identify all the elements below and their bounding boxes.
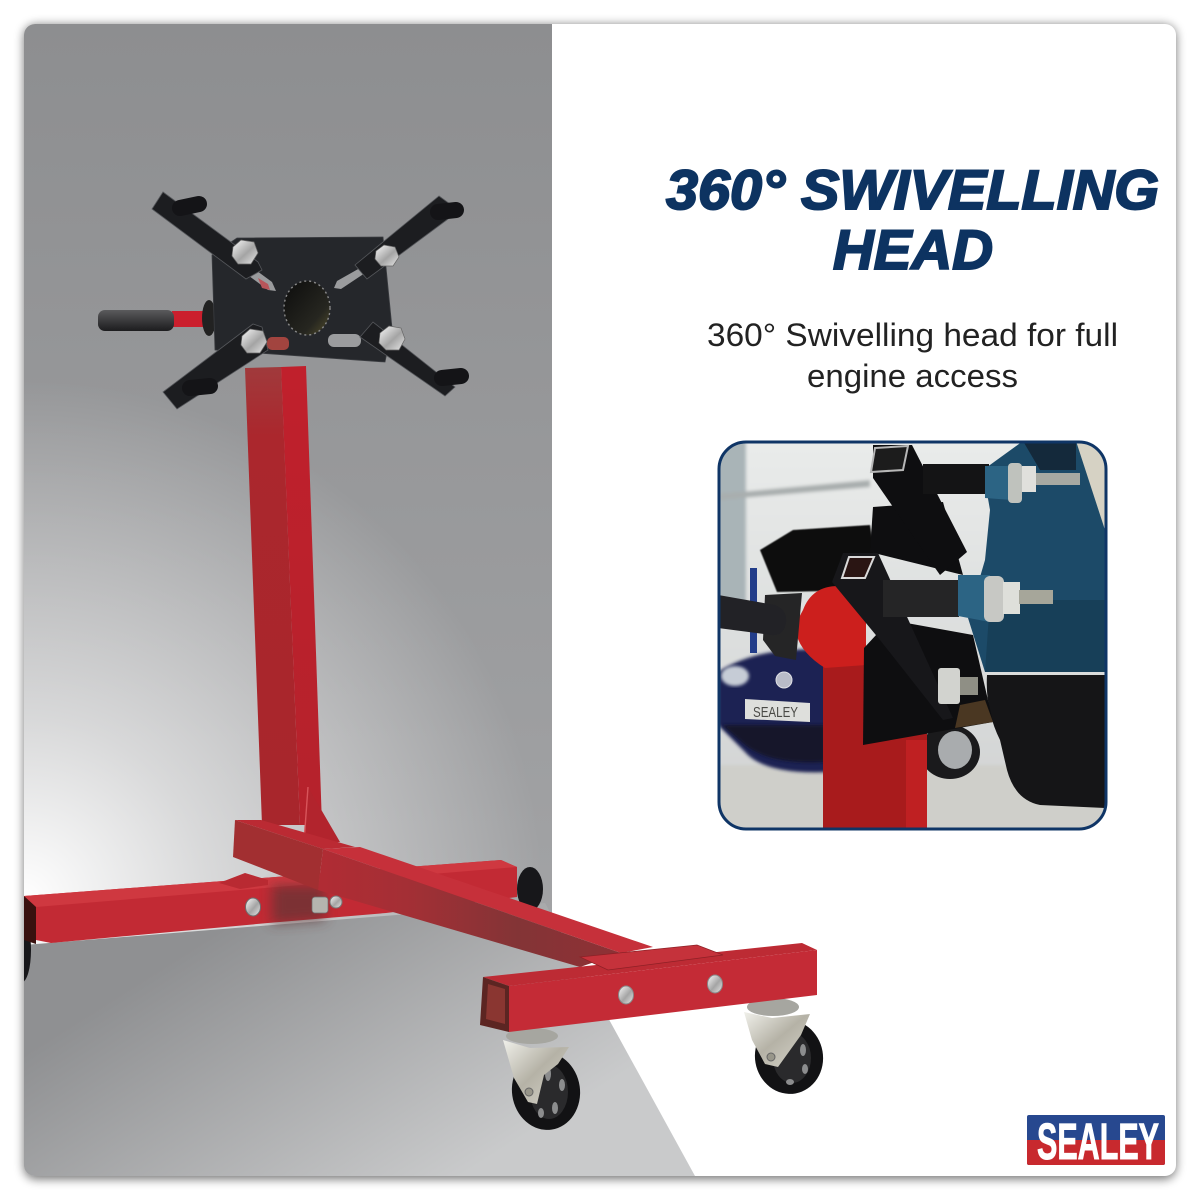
body text [707,317,1118,394]
front arm [832,446,953,720]
front cross beam [480,943,817,1032]
nuts [232,240,405,353]
vertical column [245,366,322,825]
heading: HEAD [833,218,993,281]
left edge wheel [24,940,31,982]
plate slots [245,268,365,350]
studio floor [24,903,695,1176]
black mount plates [863,445,993,745]
spine front section [318,847,653,967]
blue bosses [958,466,1012,622]
photo inset: head attached to engine [718,441,1110,832]
arms [152,192,455,409]
rear cross beam [24,860,517,944]
body text: engine access [807,358,1018,394]
gusset [304,787,340,842]
handle [98,300,216,336]
workshop background [718,441,1108,831]
sump [987,675,1105,808]
body text: 360° Swivelling head for full [707,317,1118,353]
arm tubes [180,204,461,388]
spacer tubes [883,464,989,617]
heading: 360° SWIVELLING [666,158,1159,221]
spine rear section [233,820,355,890]
heading [666,158,1159,281]
rear bolts [246,896,342,916]
number plate: SEALEY [753,704,798,721]
engine mounting head [98,192,461,409]
red stand column [795,586,927,832]
mounting plate [212,237,392,362]
engine block [968,441,1110,808]
front bolts [618,975,722,1004]
studio backdrop [24,24,552,1176]
front right caster [744,999,824,1094]
rear right wheel [517,867,543,911]
bolts [938,463,1080,704]
engine stand [13,192,829,1134]
inset border [719,442,1106,829]
panel: product image [13,24,829,1176]
number plate [745,699,810,722]
front left caster [503,1028,585,1134]
car [718,525,980,779]
collar and handle [718,593,802,660]
centre hole [284,281,330,335]
